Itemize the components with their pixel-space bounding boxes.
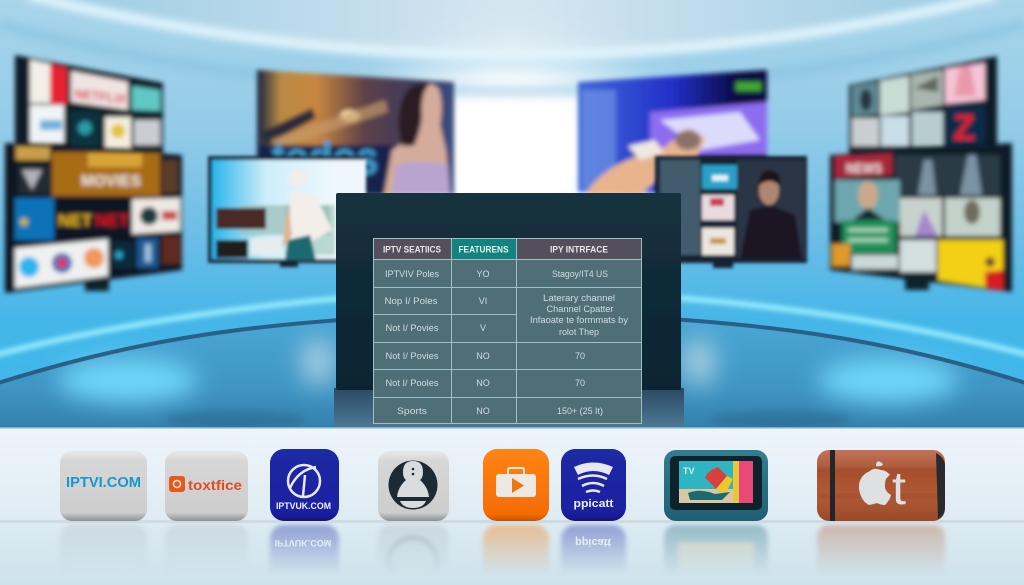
table text: 150+ (25 It) xyxy=(557,406,603,416)
table text: IPY INTRFACE xyxy=(550,244,608,256)
table text: IPTVIV Poles xyxy=(385,269,439,279)
icon: ppicatt wifi: ppicatt xyxy=(574,498,614,510)
app label: NETFLIX xyxy=(74,86,127,106)
app label: MOVIES xyxy=(81,173,141,190)
table text: NO xyxy=(476,378,490,388)
table text: rolot Thep xyxy=(559,327,599,337)
table text: Infaoate te formmats by xyxy=(530,315,629,325)
table text: Not I/ Povies xyxy=(386,323,439,333)
icon: IPTVUK.COM: IPTVUK.COM xyxy=(276,501,331,511)
icon: IPTVI.COM: IPTVI.COM xyxy=(66,475,141,491)
table text: FEATURENS xyxy=(458,244,508,256)
table text: Not I/ Pooles xyxy=(386,378,439,388)
table text: YO xyxy=(476,269,490,279)
lower shelf xyxy=(0,427,1024,585)
icon reflections: ppicatt xyxy=(575,536,611,548)
icon: teal TV device xyxy=(664,450,768,521)
TV title text: todos xyxy=(272,132,378,184)
TV: lower right with news tiles xyxy=(830,143,1012,292)
icon: toxtfice: toxtfice xyxy=(188,477,242,493)
TV: back right with reclining figure xyxy=(578,70,767,195)
table text: IPTV SEATIICS xyxy=(383,244,441,256)
TV: upper right with photo tiles xyxy=(849,56,997,160)
TV: middle right with man in suit xyxy=(655,156,807,268)
table text: Not I/ Povies xyxy=(386,351,439,361)
floor with curved edge xyxy=(0,298,1024,430)
comparison table xyxy=(373,238,642,424)
table text: Stagoy/IT4 US xyxy=(552,269,608,279)
table text: Nop I/ Poles xyxy=(384,296,438,306)
table text: Channel Cpatter xyxy=(546,304,614,314)
app label: NET xyxy=(95,211,130,230)
table text: V xyxy=(480,323,486,333)
icon: teal TV device: TV xyxy=(683,466,695,476)
table text: 70 xyxy=(575,378,585,388)
table text: Laterary channel xyxy=(543,293,615,303)
table text xyxy=(383,244,629,416)
icon: wooden Apple TV box xyxy=(817,450,945,521)
table text: Sports xyxy=(397,406,428,416)
table text: NO xyxy=(476,351,490,361)
icon reflections xyxy=(61,523,948,571)
TV: middle left with tennis player xyxy=(208,156,366,267)
table text: VI xyxy=(479,296,487,306)
table text: 70 xyxy=(575,351,585,361)
TV: upper left with app tiles xyxy=(15,55,163,160)
app label: Z xyxy=(953,107,975,148)
icon: orange video case xyxy=(483,449,549,521)
table text: NO xyxy=(476,406,490,416)
icon: toxtfice xyxy=(165,451,248,521)
app label: NET xyxy=(58,211,93,230)
icon: ppicatt wifi xyxy=(561,449,626,521)
icon reflections: IPTVUK.COM xyxy=(275,538,331,548)
TV: back left with woman xyxy=(257,70,454,195)
studio background xyxy=(0,0,1024,430)
central monitor xyxy=(334,193,684,429)
icon: wooden Apple TV box: t xyxy=(892,462,906,514)
app label: NEWS xyxy=(846,160,882,176)
TV: lower left with app tiles xyxy=(5,143,182,293)
icon: IPTVI.COM xyxy=(60,451,147,521)
icon: IPTVUK.COM xyxy=(270,449,339,521)
icon: snowman badge xyxy=(378,451,449,521)
